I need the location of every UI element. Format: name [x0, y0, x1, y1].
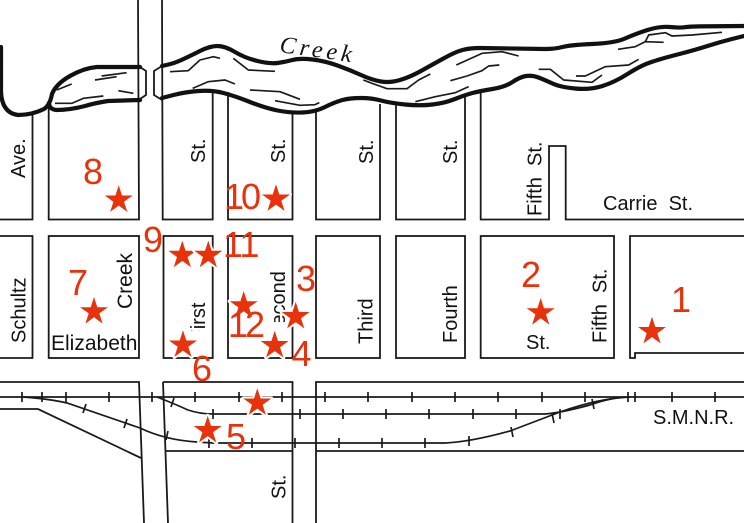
street labels: Third [356, 298, 378, 344]
creek [1, 26, 744, 115]
street labels: S.M.N.R. [653, 407, 734, 429]
location numbers: 12 [228, 304, 264, 345]
street labels: Second [268, 271, 290, 339]
bridge ends [140, 67, 146, 99]
location numbers: 3 [296, 258, 316, 299]
street labels: Creek [114, 252, 137, 309]
location numbers: 8 [83, 151, 103, 192]
street labels: Fifth St. [524, 142, 546, 216]
main line [0, 396, 744, 398]
creek ripples [55, 57, 372, 105]
label masks [187, 322, 288, 342]
location numbers: 2 [521, 254, 541, 295]
street labels: Elizabeth [51, 332, 137, 355]
location numbers: 6 [192, 348, 212, 389]
street labels: Carrie St. [603, 193, 693, 215]
location numbers: 9 [143, 219, 163, 260]
street labels: St. [440, 140, 462, 164]
third track [23, 397, 630, 443]
second track [157, 397, 630, 414]
street labels: St. [268, 139, 290, 163]
street labels: St. [268, 475, 290, 499]
location numbers: 7 [68, 262, 88, 303]
street labels: St. [526, 332, 550, 354]
cross ties [22, 392, 715, 448]
location stars [80, 184, 666, 442]
location numbers [68, 151, 691, 457]
location numbers: 10 [224, 176, 260, 217]
street labels: St. [356, 140, 378, 164]
location numbers: 4 [292, 333, 312, 374]
street labels: Fifth St. [590, 269, 612, 343]
street labels: Fourth [440, 285, 462, 343]
creek label: Creek [278, 32, 357, 69]
street labels: St. [188, 139, 210, 163]
railway tracks [0, 392, 744, 448]
street labels: Ave. [8, 138, 30, 178]
street labels [8, 138, 734, 499]
street labels: Schultz [8, 277, 30, 343]
location numbers: 1 [671, 279, 691, 320]
street labels: First [188, 302, 210, 342]
location numbers: 5 [226, 416, 246, 457]
creek banks [1, 47, 140, 115]
location numbers: 11 [223, 224, 258, 265]
